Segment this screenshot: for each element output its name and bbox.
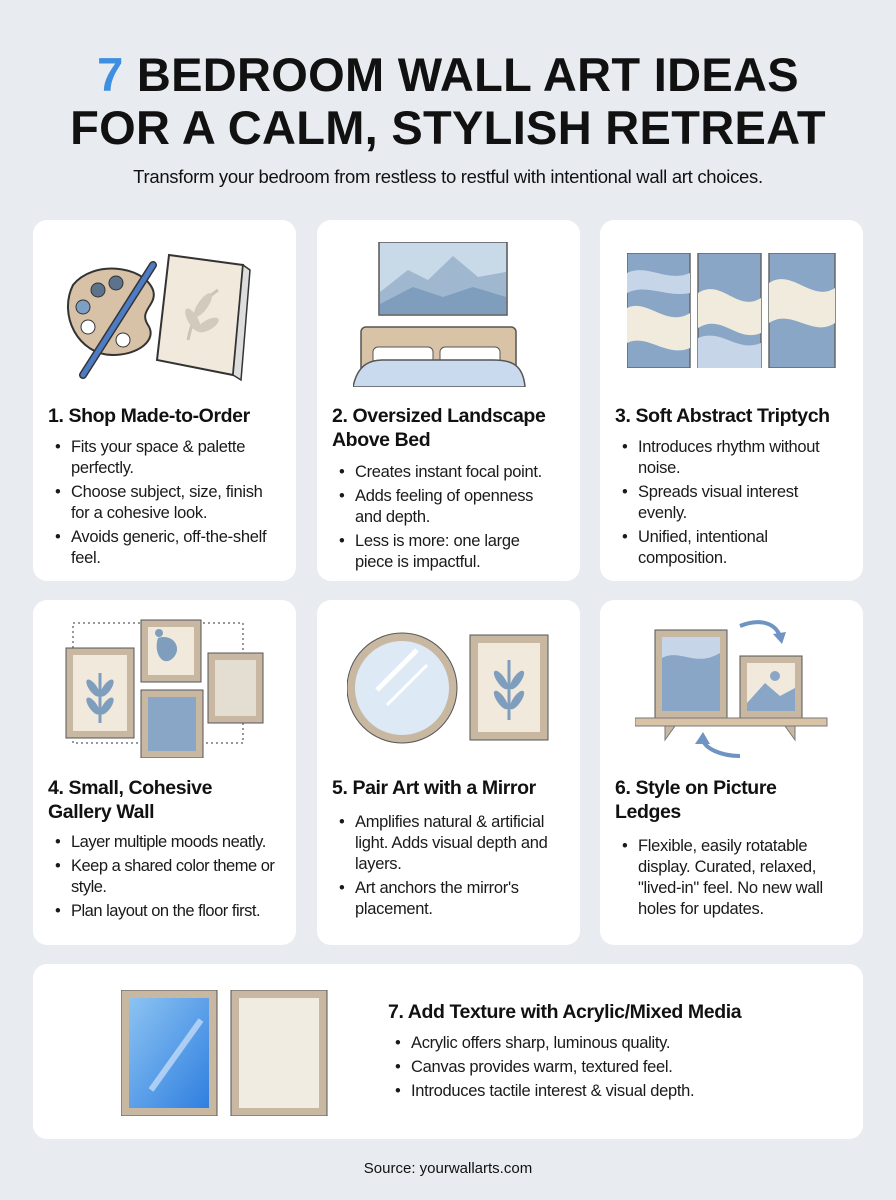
bullets — [340, 463, 542, 571]
panel: card 7 — [33, 964, 863, 1139]
bullets: Acrylic offers sharp, luminous quality. — [411, 1034, 670, 1052]
bullets: Introduces tactile interest & visual depth. — [411, 1082, 694, 1100]
bullets: Introduces rhythm without noise. — [638, 438, 819, 477]
panel: card 2 — [317, 220, 580, 581]
source: Source: yourwallarts.com — [364, 1160, 532, 1177]
title — [70, 48, 826, 154]
heading: 1. Shop Made-to-Order — [48, 405, 250, 427]
title: 7 BEDROOM WALL ART IDEAS — [97, 48, 799, 101]
bullets: Amplifies natural & artificial light. Adds visual depth and layers. — [355, 813, 548, 873]
bullets — [56, 438, 267, 567]
icon: acrylic and canvas — [121, 990, 328, 1116]
bullets: Unified, intentional composition. — [638, 528, 768, 567]
icon: abstract triptych — [627, 253, 836, 368]
bullets: Fits your space & palette perfectly. — [71, 438, 245, 477]
bullets: Art anchors the mirror's placement. — [355, 879, 519, 918]
icon: landscape above bed — [353, 242, 526, 387]
panel: card 4 — [33, 600, 296, 945]
bullets — [340, 813, 548, 918]
bullets: Avoids generic, off-the-shelf feel. — [71, 528, 266, 567]
bullets: Plan layout on the floor first. — [71, 902, 260, 920]
heading: 4. Small, Cohesive Gallery Wall — [48, 777, 212, 823]
icon: palette and canvas — [66, 254, 251, 382]
bullets: Canvas provides warm, textured feel. — [411, 1058, 673, 1076]
icon: picture ledge — [635, 620, 828, 758]
bullets — [622, 438, 820, 567]
bullets: Choose subject, size, finish for a cohesive look. — [71, 483, 263, 522]
panel: card 1 — [33, 220, 296, 581]
bullets: Less is more: one large piece is impactful. — [355, 532, 520, 571]
bullets: Creates instant focal point. — [355, 463, 542, 481]
bullets: Layer multiple moods neatly. — [71, 833, 266, 851]
panel: card 6 — [600, 600, 863, 945]
bullets — [396, 1034, 694, 1100]
panel: card 5 — [317, 600, 580, 945]
panel: card 3 — [600, 220, 863, 581]
bullets: Adds feeling of openness and depth. — [355, 487, 533, 526]
title: FOR A CALM, STYLISH RETREAT — [70, 101, 826, 154]
bullets: Flexible, easily rotatable display. Curated, relaxed, "lived-in" feel. No new wall holes for updates. — [638, 837, 823, 918]
heading: 7. Add Texture with Acrylic/Mixed Media — [388, 1001, 741, 1023]
subtitle: Transform your bedroom from restless to restful with intentional wall art choices. — [133, 166, 763, 187]
heading: 3. Soft Abstract Triptych — [615, 405, 830, 427]
bullets: Spreads visual interest evenly. — [638, 483, 798, 522]
icon: mirror and art — [347, 632, 548, 744]
heading: 6. Style on Picture Ledges — [615, 777, 776, 823]
heading: 2. Oversized Landscape Above Bed — [332, 405, 545, 451]
bullets: Keep a shared color theme or style. — [71, 857, 274, 896]
icon: gallery wall — [66, 620, 264, 758]
bullets — [56, 833, 275, 920]
heading: 5. Pair Art with a Mirror — [332, 777, 536, 799]
